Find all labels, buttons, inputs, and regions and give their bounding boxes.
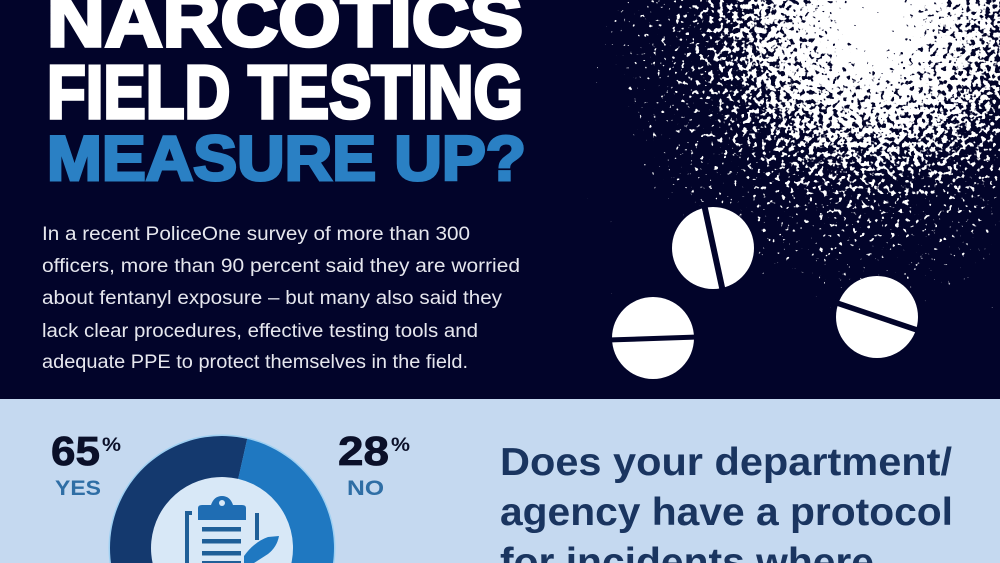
- survey question heading: [500, 441, 953, 563]
- title: MEASURE UP?: [47, 124, 526, 194]
- survey question heading: agency have a protocol: [500, 491, 953, 534]
- icon: clipboard: [187, 496, 279, 563]
- intro text block: lack clear procedures, effective testing tools and: [42, 321, 478, 342]
- stat: no 28 percent: 28: [338, 428, 389, 474]
- survey question heading: Does your department/: [500, 441, 952, 484]
- intro text block: adequate PPE to protect themselves in the field.: [42, 352, 468, 373]
- stat: no 28 percent: [338, 428, 410, 500]
- intro text block: about fentanyl exposure – but many also said they: [42, 288, 503, 309]
- title: [47, 0, 526, 194]
- stat: yes 65 percent: 65: [51, 428, 100, 474]
- intro text block: [42, 224, 520, 373]
- donut chart: [108, 434, 336, 563]
- intro text block: officers, more than 90 percent said they are worried: [42, 256, 520, 277]
- icon: pill left: [608, 297, 698, 379]
- icon: pill top: [672, 204, 754, 292]
- panel: survey result background: [0, 399, 1000, 563]
- panel: dark header background: [0, 0, 1000, 399]
- stat: no 28 percent: NO: [347, 477, 384, 500]
- stat: no 28 percent: %: [391, 435, 410, 456]
- powder splatter: [580, 0, 1000, 320]
- intro text block: In a recent PoliceOne survey of more than 300: [42, 224, 470, 245]
- stat: yes 65 percent: [51, 428, 121, 500]
- icon: pill right: [834, 276, 920, 358]
- stat: yes 65 percent: YES: [55, 477, 101, 500]
- title: FIELD TESTING: [47, 50, 523, 134]
- stat: yes 65 percent: %: [102, 435, 121, 456]
